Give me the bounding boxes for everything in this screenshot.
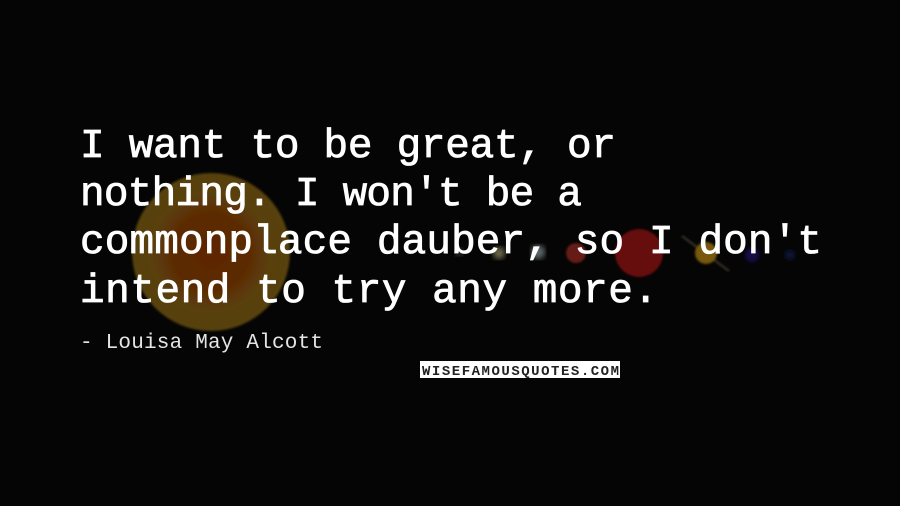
- planet: earth: [531, 245, 545, 259]
- author attribution: - Louisa May Alcott: [80, 332, 323, 355]
- planet: mars: [566, 243, 586, 263]
- planet: jupiter: [615, 229, 663, 277]
- quote text: [80, 124, 822, 315]
- watermark badge: WISEFAMOUSQUOTES.COM: [422, 364, 619, 380]
- planet: saturn: [682, 236, 729, 271]
- planets illustration: [132, 173, 795, 331]
- planet: neptune: [785, 250, 795, 260]
- quote text: nothing. I won't be a: [80, 172, 582, 218]
- quote text: intend to try any more.: [80, 269, 658, 315]
- planet: sun: [132, 173, 290, 331]
- planet: mercury: [455, 248, 463, 256]
- planet: uranus: [745, 248, 759, 262]
- quote text: commonplace dauber, so I don't: [80, 220, 822, 266]
- quote text: I want to be great, or: [80, 124, 616, 170]
- planet: venus: [493, 247, 505, 259]
